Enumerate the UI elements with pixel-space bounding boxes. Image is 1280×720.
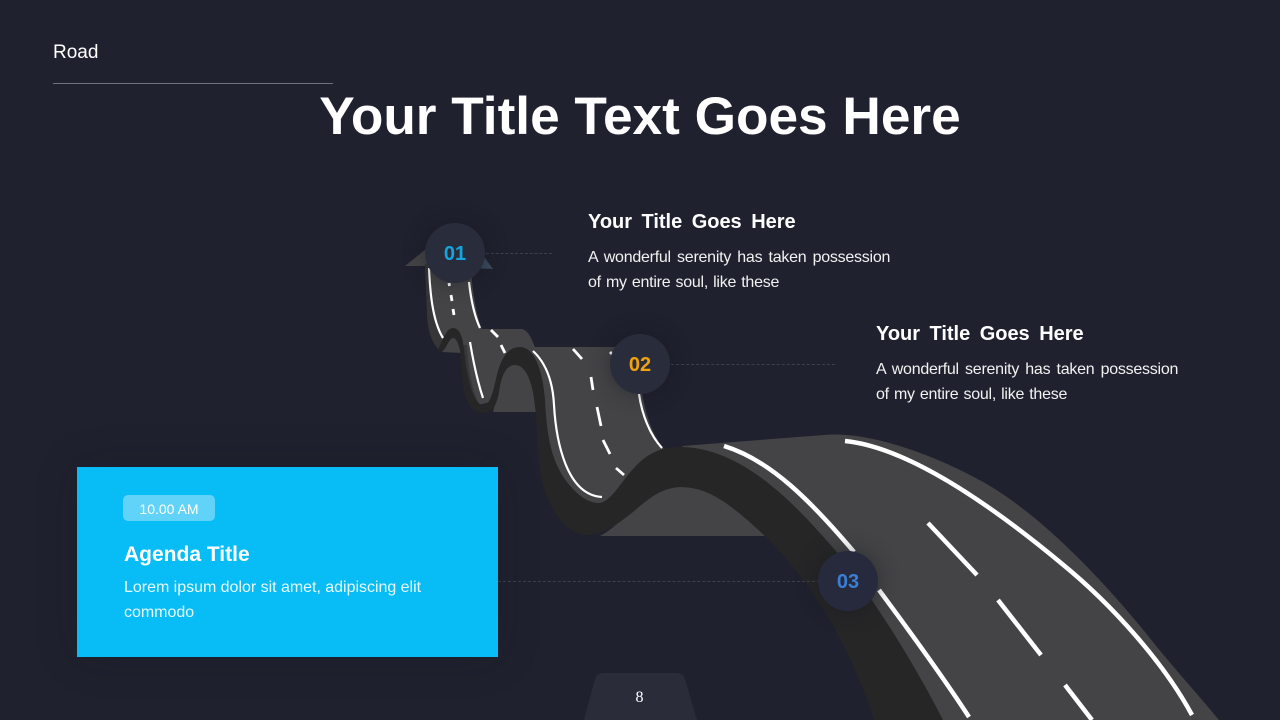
agenda card <box>77 467 498 657</box>
agenda body: commodo <box>124 604 194 621</box>
text block 01 <box>588 211 890 291</box>
time pill <box>123 495 215 521</box>
road surface: far section <box>425 264 690 510</box>
marker 03: 03 <box>837 571 859 593</box>
marker 03 <box>818 551 878 611</box>
agenda title: Agenda Title <box>124 543 250 566</box>
page number tab: 8 <box>636 689 644 706</box>
time pill: 10.00 AM <box>139 501 199 517</box>
text block 01: Your Title Goes Here <box>588 211 796 233</box>
road surface: near section <box>600 435 1219 720</box>
text block 01: A wonderful serenity has taken possession <box>588 249 890 266</box>
section label: Road <box>53 42 98 63</box>
lane markings: near section <box>724 441 1192 720</box>
text block 02 <box>876 323 1178 403</box>
title: Your Title Text Goes Here <box>319 87 961 146</box>
page number tab <box>584 673 697 720</box>
agenda body <box>124 579 421 621</box>
road shoulder band <box>438 328 943 720</box>
lane markings: far section <box>429 268 662 497</box>
marker 02 <box>610 334 670 394</box>
marker 02: 02 <box>629 354 651 376</box>
text block 02: of my entire soul, like these <box>876 386 1067 403</box>
text block 02: A wonderful serenity has taken possession <box>876 361 1178 378</box>
agenda body: Lorem ipsum dolor sit amet, adipiscing elit <box>124 579 421 596</box>
text block 01: of my entire soul, like these <box>588 274 779 291</box>
marker 01: 01 <box>444 243 466 265</box>
marker 01 <box>425 223 485 283</box>
text block 02: Your Title Goes Here <box>876 323 1084 345</box>
arrow head <box>405 241 493 269</box>
